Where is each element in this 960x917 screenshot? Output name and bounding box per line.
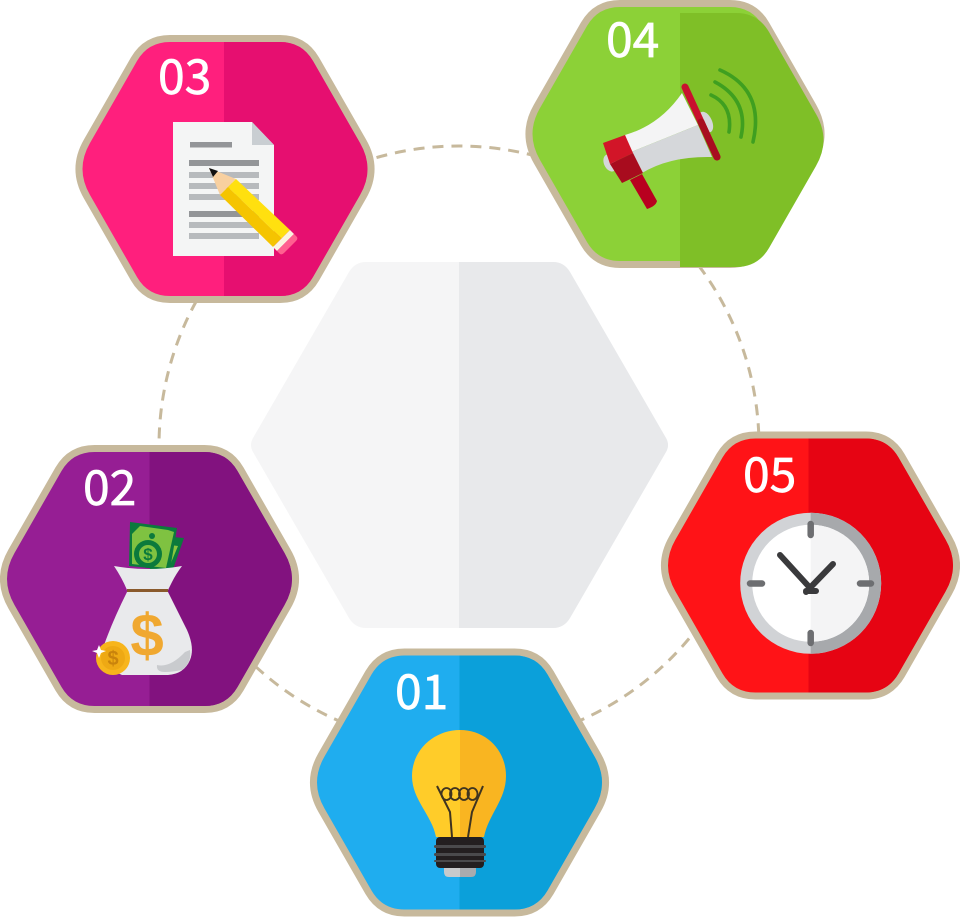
panel: step 01 light bulb	[317, 653, 602, 910]
icon: money bag with coin	[92, 522, 192, 675]
panel: step 03 document	[82, 38, 368, 296]
central hexagon	[251, 262, 668, 628]
panel: step 02 money bag	[7, 449, 292, 706]
number 04: 04	[606, 1, 659, 71]
number 03: 03	[158, 38, 211, 108]
dashed connecting ring	[159, 146, 759, 746]
icon: clock	[740, 513, 881, 654]
icon: money bag with coin: $	[143, 545, 153, 564]
panel: step 04 megaphone	[532, 1, 824, 267]
icon: document and pencil	[173, 122, 297, 256]
icon: light bulb	[412, 730, 506, 877]
number 05: 05	[743, 436, 796, 506]
icon: money bag with coin: $	[107, 648, 119, 670]
number 02: 02	[83, 449, 136, 519]
number 01: 01	[395, 653, 448, 723]
panel: step 05 clock	[668, 436, 953, 692]
icon: money bag with coin: $	[130, 602, 164, 669]
icon: megaphone	[601, 70, 756, 209]
